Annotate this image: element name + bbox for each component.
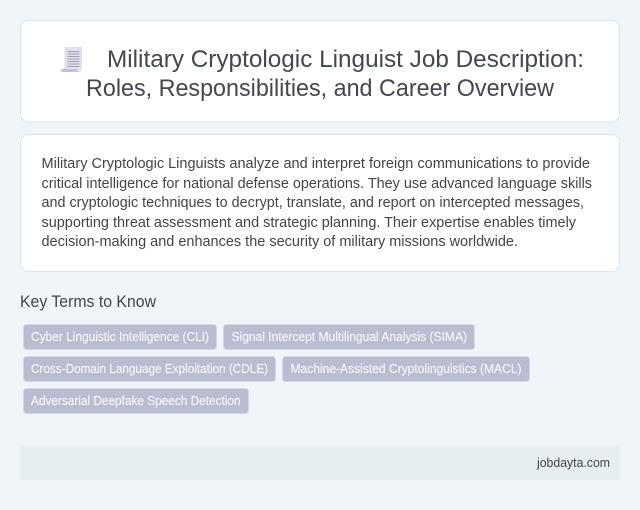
title: Military Cryptologic Linguist Job Description:: [107, 46, 584, 73]
chip: CDLE: [24, 356, 276, 382]
panel: description: [20, 134, 620, 272]
chip: SIMA: [224, 324, 474, 350]
chip: CLI: Cyber Linguistic Intelligence (CLI): [31, 330, 209, 344]
text block: description paragraph: Military Cryptologic Linguists analyze and interpret foreign communications to provide: [42, 156, 590, 172]
heading: key terms: Key Terms to Know: [20, 293, 156, 311]
chip: CLI: [24, 324, 216, 350]
chip: MACL: Machine-Assisted Cryptolinguistics (MACL): [290, 362, 522, 376]
panel: key term chips: [24, 324, 530, 414]
title: Roles, Responsibilities, and Career Overview: [86, 75, 554, 102]
footer: jobdayta.com: [536, 456, 610, 470]
chip: deepfake detection: Adversarial Deepfake Speech Detection: [31, 394, 241, 408]
title: [86, 46, 584, 102]
text block: description paragraph: supporting threat assessment and strategic planning. Their expertise enables timely: [42, 215, 577, 231]
footer: [20, 446, 620, 480]
icon: document scroll: [61, 47, 82, 72]
text block: description paragraph: [42, 156, 592, 250]
chip: MACL: [282, 356, 530, 382]
chip: CDLE: Cross-Domain Language Exploitation (CDLE): [31, 362, 268, 376]
text block: description paragraph: critical intelligence for national defense operations. They use advanced language skills: [42, 176, 592, 192]
text block: description paragraph: and cryptologic techniques to decrypt, translate, and report on intercepted messages,: [42, 195, 584, 211]
text block: description paragraph: decision-making and enhances the security of military missions worldwide.: [42, 234, 518, 250]
chip: deepfake detection: [24, 388, 248, 414]
chip: SIMA: Signal Intercept Multilingual Analysis (SIMA): [232, 330, 467, 344]
panel: title card: [20, 20, 620, 122]
